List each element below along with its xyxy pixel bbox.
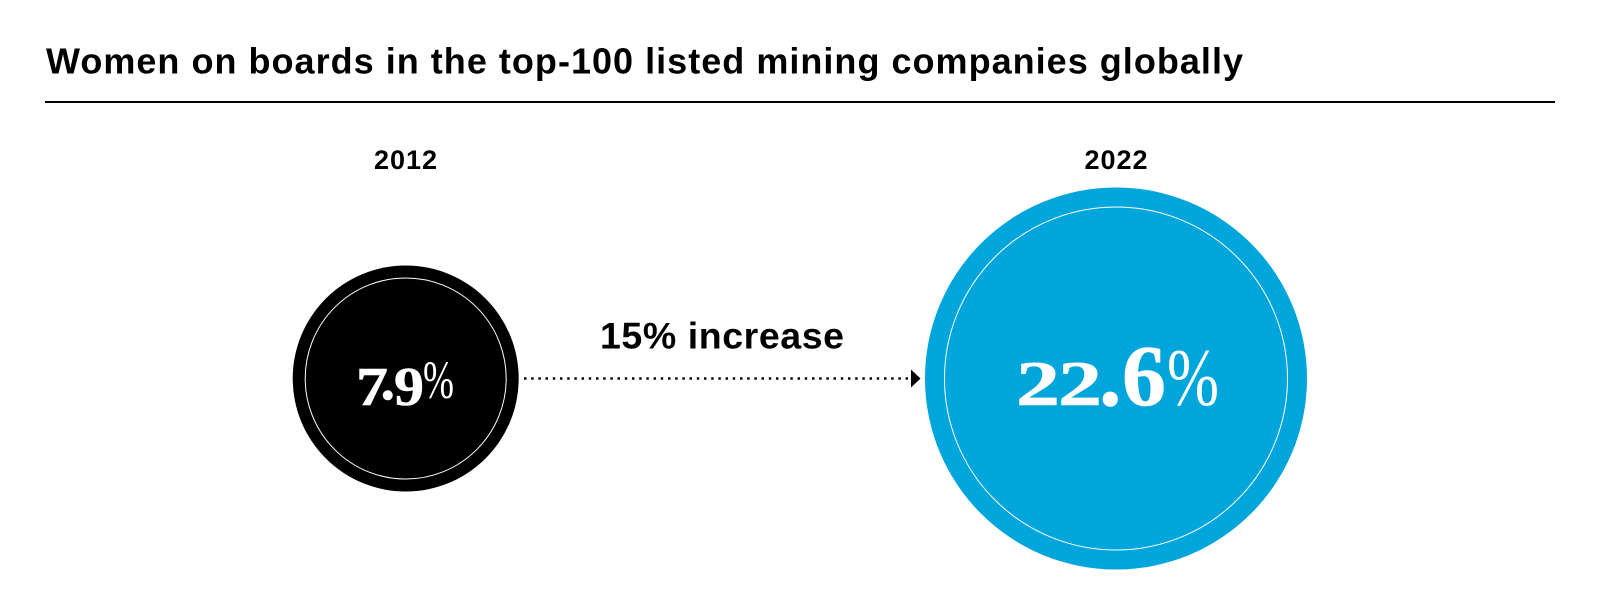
circle: 2012 value — [293, 266, 519, 492]
label: 2022: 2022 — [1084, 145, 1148, 175]
arrow — [524, 370, 920, 388]
circle: 2012 value: 7 — [356, 356, 388, 417]
circle: 2012 value: 9 — [394, 356, 424, 417]
circle: 2022 value — [925, 188, 1307, 570]
circle: 2022 value: 6 — [1122, 327, 1166, 424]
circle: 2022 value: % — [1167, 332, 1219, 423]
title: Women on boards in the top-100 listed mining companies globally — [46, 40, 1243, 82]
increase label: 15% increase — [600, 314, 844, 356]
circle: 2022 value: . — [1099, 326, 1122, 425]
circle: 2012 value: % — [423, 350, 454, 410]
circle: 2012 value: . — [380, 347, 395, 412]
circle: 2022 value: 2 — [1058, 348, 1102, 419]
circle: 2022 value: 2 — [1016, 348, 1060, 419]
label: 2012: 2012 — [374, 145, 437, 175]
